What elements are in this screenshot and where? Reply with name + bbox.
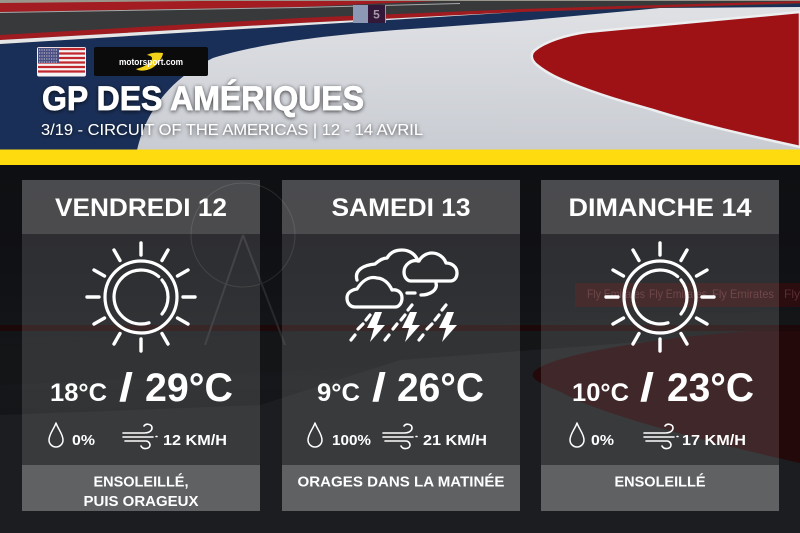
forecast: PUIS ORAGEUX <box>84 494 199 510</box>
temperatures: / <box>640 366 654 410</box>
page background: Fly Emirates <box>649 287 707 301</box>
red painted runoff <box>532 12 800 147</box>
forecast <box>84 474 199 510</box>
subtitle: 3/19 - CIRCUIT OF THE AMERICAS | 12 - 14 AVRIL <box>41 122 423 139</box>
rain probability: 0% <box>591 433 614 449</box>
day heading: SAMEDI 13 <box>332 194 470 222</box>
turn 5 sign <box>353 5 386 23</box>
rain probability <box>570 423 614 449</box>
panel: Samedi 13 <box>282 180 520 511</box>
temperatures: 29°C <box>145 366 233 410</box>
logo: motorsport.com: motorsport.com <box>119 57 183 67</box>
turn 5 sign: 5 <box>373 8 380 22</box>
wind <box>383 424 487 449</box>
header photo of the circuit <box>0 0 800 150</box>
wind: 21 KM/H <box>423 433 487 449</box>
icon: sun <box>606 243 714 351</box>
temperatures: 9°C <box>317 379 360 407</box>
forecast: ENSOLEILLÉ, <box>94 474 188 490</box>
icon: sun <box>87 243 195 351</box>
wind: 17 KM/H <box>682 433 746 449</box>
day heading: VENDREDI 12 <box>55 194 227 222</box>
icon: thunderstorm clouds <box>347 250 457 342</box>
title: GP DES AMÉRIQUES <box>42 80 364 118</box>
rain probability <box>308 423 371 449</box>
temperatures <box>50 366 233 410</box>
wind <box>123 424 227 449</box>
yellow band <box>0 150 800 165</box>
flag: United States <box>37 47 86 76</box>
temperatures: 10°C <box>572 379 629 407</box>
temperatures: / <box>119 366 133 410</box>
page background: Fly <box>784 287 800 301</box>
temperatures: / <box>372 366 386 410</box>
panel: Dimanche 14 <box>541 180 779 511</box>
page background: Fly Emirates <box>712 287 774 301</box>
rain probability <box>49 423 95 449</box>
temperatures <box>317 366 484 410</box>
page background: Fly Emirates <box>587 287 645 301</box>
temperatures <box>572 366 754 410</box>
rain probability: 100% <box>332 433 371 449</box>
forecast: ENSOLEILLÉ <box>614 474 706 490</box>
wind: 12 KM/H <box>163 433 227 449</box>
panel: Vendredi 12 <box>22 180 260 511</box>
temperatures: 23°C <box>667 366 754 410</box>
day heading: DIMANCHE 14 <box>568 194 752 222</box>
rain probability: 0% <box>72 433 95 449</box>
forecast: ORAGES DANS LA MATINÉE <box>298 474 505 490</box>
temperatures: 26°C <box>397 366 484 410</box>
logo: motorsport.com <box>94 47 208 76</box>
wind <box>644 424 746 449</box>
temperatures: 18°C <box>50 379 107 407</box>
